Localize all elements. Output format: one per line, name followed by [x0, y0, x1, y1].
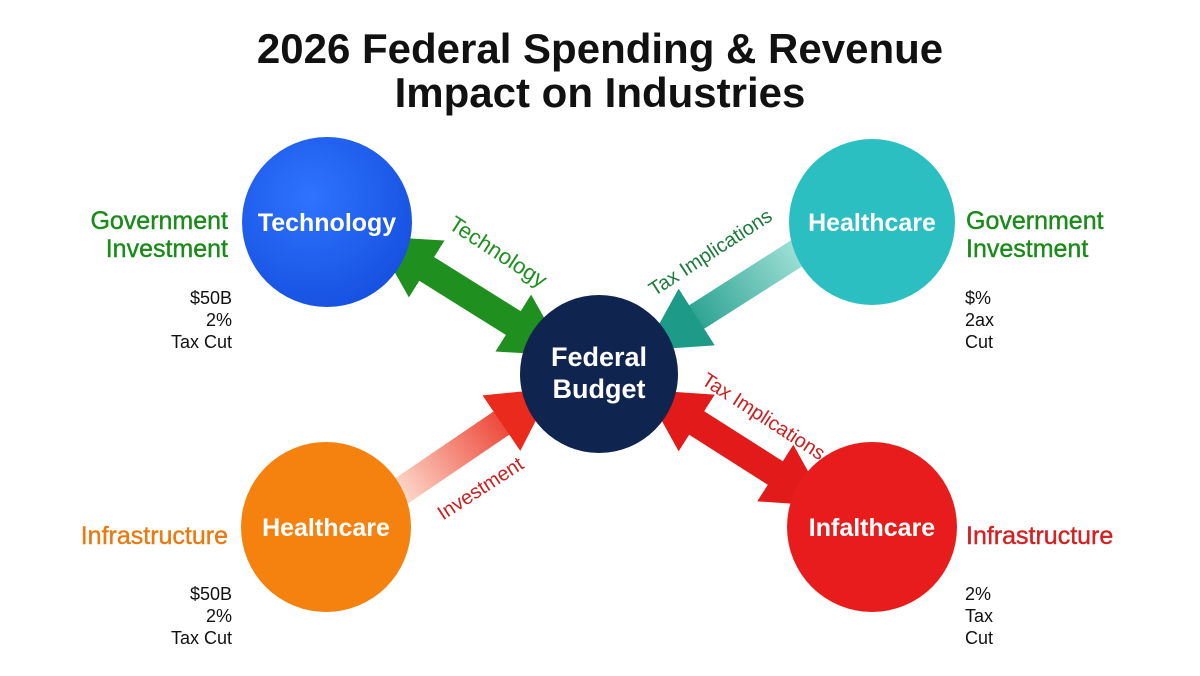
stats: bottom-left [171, 584, 232, 648]
title: Impact on Industries [395, 69, 805, 116]
stats: bottom-right: Cut [965, 628, 993, 648]
circle: Healthcare (orange): Healthcare [262, 514, 390, 542]
label: top-right Government Investment: Investment [966, 235, 1088, 263]
stats: top-left: 2% [206, 310, 232, 330]
stats: bottom-left: Tax Cut [171, 628, 232, 648]
label: top-left Government Investment [90, 207, 228, 263]
circle: Healthcare (orange) [241, 442, 411, 612]
stats: bottom-left: $50B [190, 584, 232, 604]
circle: Healthcare (teal): Healthcare [808, 209, 936, 237]
label: top-right Government Investment [966, 207, 1104, 263]
label: top-right Government Investment: Government [966, 207, 1104, 235]
stats: top-right: Cut [965, 332, 993, 352]
circle: Infalthcare (red) [787, 442, 957, 612]
stats: top-right [965, 288, 994, 352]
stats: top-right: 2ax [965, 310, 994, 330]
arrow: tax implications (red, double) [692, 420, 780, 476]
label: bottom-left Infrastructure: Infrastructure [81, 522, 228, 550]
stats: top-left [171, 288, 232, 352]
arrow label: Technology: Technology [445, 211, 552, 293]
stats: bottom-right: Tax [965, 606, 993, 626]
title [257, 25, 943, 116]
arrow label: Tax Implications (teal): Tax Implications [645, 205, 776, 301]
title: 2026 Federal Spending & Revenue [257, 25, 943, 72]
label: bottom-right Infrastructure: Infrastructure [966, 522, 1113, 550]
circle: Technology: Technology [258, 209, 396, 237]
circle: Federal Budget: Federal [551, 342, 647, 372]
stats: bottom-left: 2% [206, 606, 232, 626]
circle: Federal Budget [520, 295, 678, 453]
stats: bottom-right: 2% [965, 584, 991, 604]
circle: Technology [242, 137, 412, 307]
circle: Healthcare (teal) [789, 139, 955, 305]
label: top-left Government Investment: Investment [106, 235, 228, 263]
arrow label: Investment: Investment [434, 453, 528, 525]
circle: Infalthcare (red): Infalthcare [809, 514, 935, 542]
arrow: investment (orange-red) [400, 420, 506, 492]
stats: top-left: $50B [190, 288, 232, 308]
stats: bottom-right [965, 584, 993, 648]
circle: Federal Budget: Budget [553, 374, 646, 404]
arrow: tax implications (teal) [692, 248, 805, 320]
label: top-left Government Investment: Government [90, 207, 228, 235]
arrow label: Tax Implications (red): Tax Implications [698, 369, 829, 465]
stats: top-right: $% [965, 288, 991, 308]
stats: top-left: Tax Cut [171, 332, 232, 352]
arrow: technology (green, double) [422, 266, 518, 326]
